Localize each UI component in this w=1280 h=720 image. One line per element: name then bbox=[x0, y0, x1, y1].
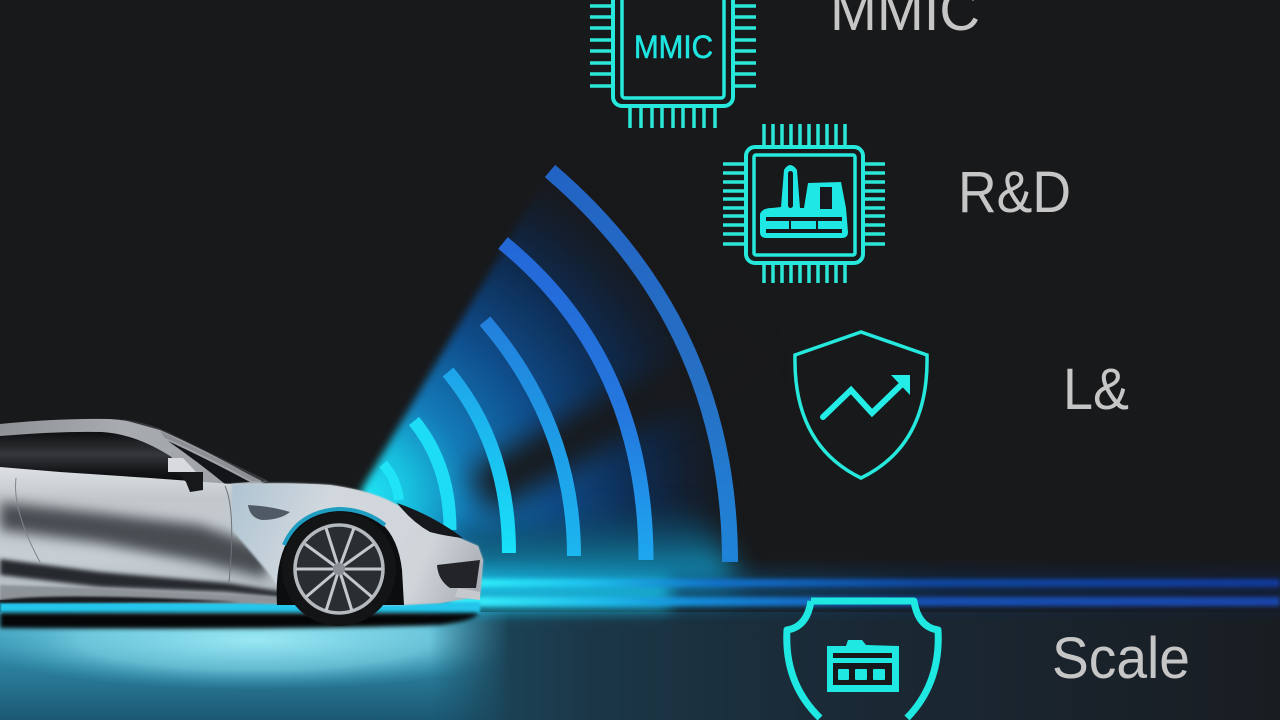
label: R&D: R&D bbox=[958, 160, 1071, 225]
arc 1 bbox=[383, 464, 399, 500]
label: L&: L& bbox=[1063, 357, 1129, 422]
arc 5 bbox=[503, 243, 646, 560]
icon: factory chip bbox=[723, 124, 885, 283]
door shut lines and sill bbox=[0, 478, 285, 604]
icon: shield with rising line bbox=[795, 332, 927, 478]
label: Scale: Scale bbox=[1052, 626, 1190, 691]
battery glyph bbox=[827, 640, 899, 692]
car body bbox=[0, 467, 483, 605]
floor glow bbox=[0, 612, 1257, 720]
car windows bbox=[0, 432, 200, 484]
car bbox=[0, 419, 483, 629]
factory glyph bbox=[760, 165, 848, 238]
icon: shield with battery bbox=[787, 601, 938, 718]
front wing bbox=[232, 483, 483, 605]
car underglow and shadow bbox=[0, 602, 480, 629]
chip label: MMIC bbox=[634, 29, 713, 65]
headlight bbox=[397, 503, 463, 538]
rear roof shading bbox=[120, 419, 268, 482]
body dark sweep bbox=[0, 502, 272, 578]
arc 4 bbox=[485, 321, 574, 556]
car roof bbox=[0, 419, 268, 490]
wheel arch bbox=[277, 508, 404, 605]
arc 6 bbox=[550, 171, 730, 562]
radar wave arcs bbox=[383, 171, 730, 562]
front wheel bbox=[282, 512, 396, 626]
arc 2 bbox=[414, 421, 450, 530]
radar beam fan bbox=[360, 165, 750, 590]
windscreen bbox=[168, 441, 250, 484]
side vent bbox=[248, 505, 290, 520]
ground light streaks bbox=[440, 558, 1280, 622]
icon: MMIC chip bbox=[590, 0, 756, 128]
arc 3 bbox=[448, 372, 509, 553]
side mirror bbox=[168, 458, 196, 472]
front grille bbox=[437, 560, 480, 588]
